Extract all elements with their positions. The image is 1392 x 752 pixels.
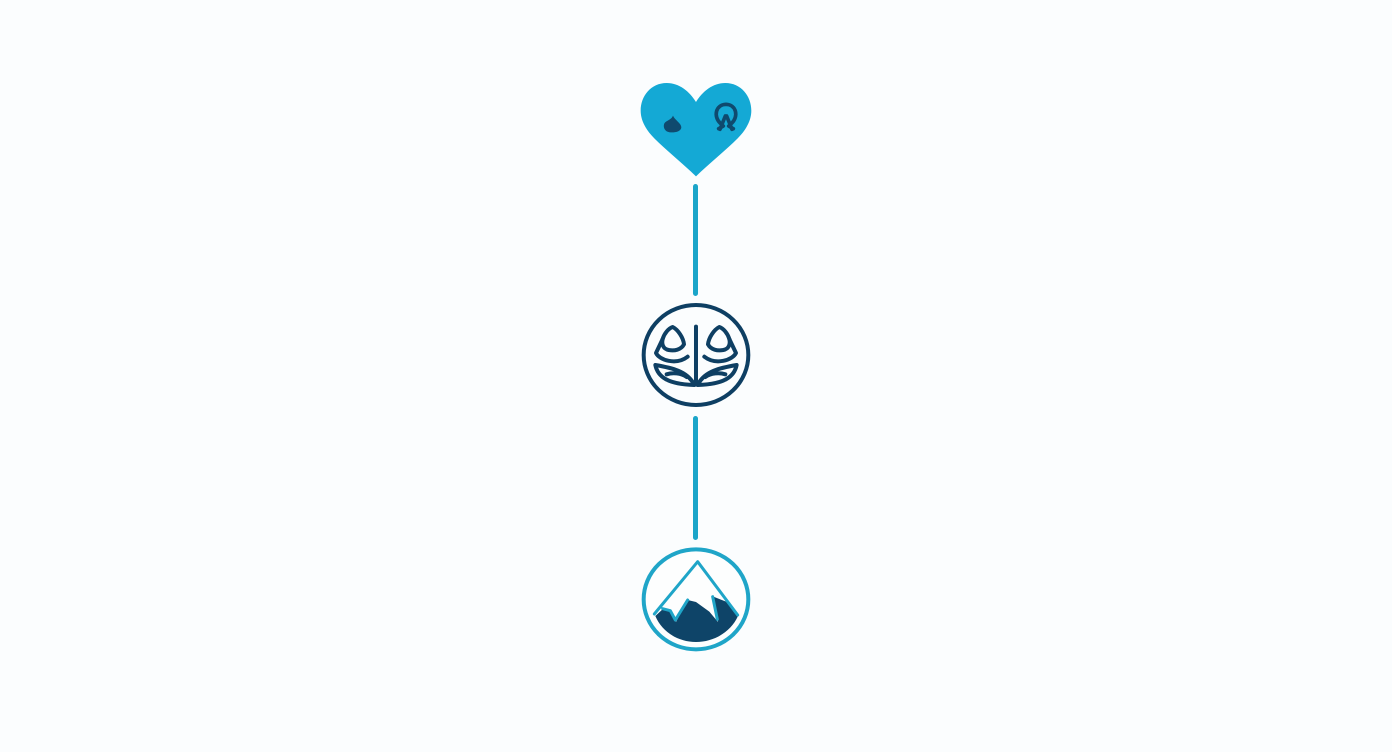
arrow: upper connector line bbox=[693, 184, 698, 296]
left half of brain bbox=[655, 327, 694, 385]
mountain dark base bbox=[655, 597, 738, 642]
mountain peak outline bbox=[654, 562, 738, 620]
arrow: lower connector line bbox=[693, 416, 698, 540]
icon: heart bbox=[641, 83, 751, 176]
icon: mountain in circle bbox=[644, 549, 748, 649]
icon: drop inside heart bbox=[664, 116, 681, 132]
icon: ribbon ring inside heart bbox=[716, 104, 736, 129]
icon: brain and leaves in circle bbox=[644, 305, 748, 405]
right half of brain bbox=[698, 327, 737, 385]
